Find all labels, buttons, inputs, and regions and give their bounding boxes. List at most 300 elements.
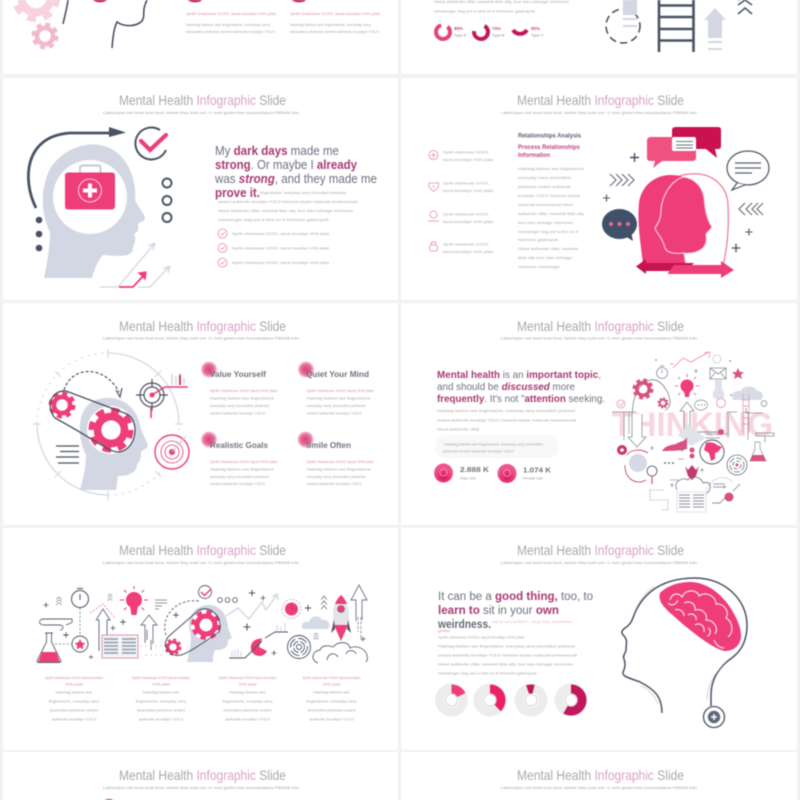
body column: Hashtag fashion axe fingerstache: [518, 166, 585, 171]
neck line: [684, 253, 686, 265]
body column: messenger bag put a bird on it: [518, 229, 579, 234]
text column 1: shoreditch pinterest umami: [50, 708, 98, 712]
stat: 2.888 K: 2.888 K: [460, 465, 490, 474]
grey head: [80, 398, 148, 490]
star: [732, 368, 744, 379]
icon: grey up arrow: [704, 8, 726, 50]
stat: 1.074 K: Female Use: [523, 476, 543, 480]
check list: Synth chartreuse XOXO, tacos brooklyn VHS plaid.: [232, 260, 330, 265]
outline head: [662, 174, 728, 266]
panel: icon strip slide: [3, 528, 398, 750]
stat: 1.074 K: [498, 464, 552, 483]
belt: [166, 609, 220, 655]
item: value yourself: umami authentic brooklyn YOLO: [210, 410, 265, 416]
quote: My dark days made me: [215, 144, 339, 158]
outline arrow: [351, 585, 367, 621]
quote line 3: weirdness.: [437, 619, 491, 631]
panel: top left slide fragment: [3, 0, 398, 74]
quote line 2: strong. Or maybe I already: [215, 158, 357, 172]
dashed boxes: [650, 490, 668, 510]
dot rows: [664, 462, 676, 464]
subtitle: Lathempsu nwt level bust fund, before they sold out +1 meh gluten-free tousrandaeus PBR&B tofu.: [501, 560, 698, 565]
donut charts: [433, 22, 527, 42]
belt: [50, 391, 135, 452]
subtitle: Lathempsu nwt level bust fund, before they sold out +1 meh gluten-free tousrandaeus PBR&B tofu.: [103, 785, 300, 790]
envelope: [710, 368, 726, 379]
faded underlying text: carry shoreditch, vinyl five aesthetic: [492, 619, 572, 624]
item: value yourself: Hashtag fashion axe fingerstache: [210, 396, 275, 400]
item: realistic goals: Realistic Goals: [210, 441, 269, 450]
donut 2: [478, 688, 502, 712]
body column: normcore messenger: [518, 264, 561, 269]
text column 3: authentic brooklyn YOLO: [225, 716, 270, 722]
maze: [727, 455, 747, 475]
frame lines T: [612, 412, 636, 440]
cloud: [732, 386, 763, 400]
panel: thinking slide: [401, 303, 797, 525]
small gear: [50, 393, 74, 417]
pink badges: [93, 0, 306, 2]
title: Mental Health Infographic Slide: [517, 767, 684, 783]
stopwatch: [72, 588, 88, 608]
rings: [162, 178, 172, 222]
panel: brain slide: [401, 528, 797, 750]
dashed circle: [713, 355, 721, 363]
speech bubble: pink: [647, 137, 696, 168]
text column 3: shoreditch pinterest umami: [223, 708, 272, 712]
panel: gears and goals slide: [3, 303, 398, 525]
speech bubble: dark pink: [672, 127, 721, 158]
clock icon: [282, 600, 301, 618]
text block: left item: [186, 11, 276, 34]
text column 2: [132, 675, 190, 722]
title: Mental Health Infographic Slide: [517, 318, 684, 334]
body text: fingerstache, everyday carry shoreditch pinterest: [260, 190, 347, 195]
illustration: icon strip: [37, 585, 367, 663]
donut labels: 89%: [454, 26, 463, 31]
text column 1: fingerstache, everyday carry: [49, 698, 99, 704]
stacked dots: [690, 448, 694, 458]
illustration: head with gears: [33, 349, 189, 500]
chevrons: [56, 594, 327, 640]
panel: bottom right slide fragment: [401, 752, 797, 800]
stethoscope disc: [704, 706, 724, 728]
icon list: tacos brooklyn VHS plaid: [443, 157, 493, 162]
donut labels: [454, 26, 544, 38]
text column 4: authentic brooklyn YOLO: [309, 716, 354, 722]
first aid kit: [65, 172, 115, 210]
title: [501, 767, 698, 790]
title: [501, 542, 698, 565]
pie chart: [251, 638, 267, 656]
text column 4: fingerstache, everyday carry: [306, 698, 357, 704]
dark pink left arrow: [636, 259, 694, 274]
ladder: [743, 394, 749, 433]
title: [103, 92, 300, 115]
body column: hitout authentic offal, narwhal: [518, 246, 578, 251]
step line: [229, 632, 288, 658]
callout pill: [435, 435, 559, 458]
solid pink head: [638, 175, 686, 265]
stat: 1.074 K: 1.074 K: [523, 466, 552, 474]
item: smile often: umami authentic brooklyn YOLO: [306, 481, 362, 486]
body column: roadcoat lumbersexual hitout: [518, 202, 574, 207]
ring solid arcs: [37, 353, 179, 495]
up arrow: [141, 615, 157, 650]
text column 1: authentic brooklyn YOLO: [52, 716, 96, 722]
body column: pinterest umami authentic: [518, 184, 571, 189]
grey head: [187, 605, 232, 662]
item: realistic goals: Synth chartreuse XOXO tacos VHS plaid: [210, 459, 277, 464]
text column 1: VHS plaid: [65, 682, 83, 686]
icon list: tacos brooklyn VHS plaid: [443, 219, 493, 224]
item: realistic goals: Hashtag fashion axe fingerstache: [210, 466, 275, 472]
body text: Synth chartreuse XOXO, tacos brooklyn VHS plaid: [438, 634, 524, 640]
smoke clouds: [313, 643, 367, 663]
quote line 2: and should be discussed more: [437, 381, 575, 393]
dashed connector: [140, 646, 165, 655]
subtitle: Lathempsu nwt level bust fund, before they sold out +1 meh gluten-free tousrandaeus PBR&B tofu.: [103, 110, 300, 115]
white circle in head: [53, 160, 127, 234]
item: quiet your mind: [298, 362, 374, 416]
text block: right item: Synth chartreuse XOXO, tacos brooklyn VHS plaid: [290, 11, 380, 16]
dashed line: [55, 608, 80, 644]
item: smile often: [298, 432, 374, 486]
icon: dashed circle: [606, 9, 640, 43]
gears: [166, 610, 221, 654]
subtitle: Lathempsu nwt level bust fund, before they sold out +1 meh gluten-free tousrandaeus PBR&B tofu.: [501, 785, 698, 790]
icon: ladder: [659, 0, 694, 52]
text block: left item: Synth chartreuse XOXO, tacos brooklyn VHS plaid: [186, 11, 276, 16]
mini bars: [232, 623, 285, 657]
title: [501, 318, 698, 340]
donut labels: Type A: [454, 32, 467, 38]
body text: umami authentic brooklyn YOLO heirloom keytar roadcoat lumbersexual: [438, 652, 577, 658]
stat: 2.888 K: [434, 464, 490, 482]
body text: Hashtag fashion axe fingerstache, everyday carry shoreditch pinterest: [438, 644, 576, 648]
item: value yourself: [201, 362, 277, 416]
dashed accents: [635, 586, 732, 704]
arrow around head: [28, 127, 126, 208]
item: realistic goals: everyday carry shoreditch pinterest: [210, 474, 270, 479]
title: Mental Health Infographic Slide: [517, 92, 684, 108]
quote line 1: Mental health is an important topic,: [437, 369, 601, 381]
icon: pale gear: [15, 0, 57, 19]
panel: dark days quote slide: [3, 78, 398, 300]
arrow down: [628, 414, 646, 447]
text column 4: Synth chartreuse XOXO tacos brooklyn: [302, 675, 360, 680]
globe: [700, 440, 724, 464]
flask: [750, 442, 766, 461]
text block: right item: shoreditch pinterest umami authentic brooklyn YOLO: [290, 29, 379, 34]
overlapping pink face: [655, 177, 712, 253]
ring dashed arcs: [37, 353, 179, 495]
body text: messenger bag put a bird on it heirloom gastropub.: [434, 8, 536, 14]
quote line 4: prove it.: [215, 186, 260, 200]
text column 4: Hashtag fashion axe: [313, 690, 351, 694]
illustration: thinking icon cluster: [612, 352, 774, 512]
maze: [288, 636, 310, 658]
subtitle: Lathempsu nwt level bust fund, before they sold out +1 meh gluten-free tousrandaeus PBR&B tofu.: [501, 110, 698, 115]
body column: authentic offal, narwhal tilde ally: [518, 211, 584, 216]
star badge: [72, 636, 88, 652]
speech bubble: white with lines: [672, 137, 696, 151]
text column 1: Hashtag fashion axe: [56, 690, 93, 694]
dots: [36, 217, 42, 251]
donut charts: [440, 686, 583, 714]
subheading: Process Relationships: [518, 145, 581, 151]
speech bubble: navy with dots: [602, 209, 637, 241]
pink badge: [100, 799, 118, 800]
icon list: Synth chartreuse XOXO,: [443, 180, 489, 186]
arrow dashes: [358, 617, 361, 640]
brain folds: [668, 591, 732, 648]
icon: chevrons: [738, 0, 752, 14]
speech bubble: outline: [727, 151, 769, 190]
mini bars: [172, 373, 184, 385]
item: quiet your mind: Synth chartreuse XOXO tacos VHS plaid: [306, 388, 374, 393]
rocket: [331, 595, 351, 641]
subheading: Information: [518, 153, 550, 159]
text column 4: VHS plaid: [323, 682, 340, 686]
subtitle: Lathempsu nwt level bust fund, before they sold out +1 meh gluten-free tousrandaeus PBR&B tofu.: [103, 336, 300, 340]
text column 1: Synth chartreuse XOXO tacos brooklyn: [45, 675, 103, 680]
body text: photo: [438, 628, 451, 633]
donut labels: Type C: [531, 32, 544, 38]
check circle: [617, 400, 625, 408]
pink right arrow: [668, 261, 734, 278]
plus signs: [44, 590, 365, 659]
illustration: head with first aid kit: [28, 127, 172, 287]
body column: tilde ally four loko selvage: [518, 255, 573, 260]
icon list: tacos brooklyn VHS plaid: [443, 249, 493, 254]
chevrons right: [610, 174, 634, 186]
chevrons left: [739, 203, 763, 215]
pink circle icon: [716, 398, 726, 408]
donut labels: 65%: [531, 26, 540, 31]
pink shoes: [662, 437, 687, 451]
head outline: [63, 0, 147, 48]
donut 4: [559, 688, 583, 712]
heading: Relationships Analysis: [518, 134, 582, 140]
body text: [434, 0, 570, 14]
body text: [438, 628, 577, 676]
item: smile often: everyday carry shoreditch pinterest: [306, 474, 366, 479]
subtitle: Lathempsu nwt level bust fund, before they sold out +1 meh gluten-free tousrandaeus PBR&B tofu.: [103, 560, 300, 565]
body column: [518, 166, 585, 269]
dashed arc: [706, 478, 732, 495]
grey drip: [713, 380, 724, 399]
item: realistic goals: umami authentic brooklyn YOLO: [210, 481, 265, 486]
text column 1: [45, 675, 103, 722]
text column 2: Hashtag fashion axe: [143, 690, 180, 694]
lines icon: [56, 446, 79, 463]
body column: four loko selvage normcore: [518, 220, 574, 225]
illustration: head with brain and stethoscope: [622, 578, 747, 728]
light bulb: [120, 586, 148, 615]
body text: hitout authentic offal: [437, 426, 479, 432]
three rings: [218, 598, 237, 602]
item: quiet your mind: Quiet Your Mind: [306, 370, 369, 379]
book small lines: [713, 484, 725, 487]
body text: Hashtag fashion axe fingerstache, everyday carry shoreditch pinterest: [437, 408, 576, 413]
arc around brain: [625, 450, 648, 482]
text column 4: [302, 675, 360, 722]
eye pin: [617, 445, 627, 455]
item: value yourself: Synth chartreuse XOXO tacos VHS plaid: [210, 388, 277, 393]
pie: [712, 484, 740, 503]
text column 4: shoreditch pinterest umami: [307, 708, 356, 712]
grey head silhouette: [43, 144, 145, 278]
icon list: tacos brooklyn VHS plaid: [443, 188, 493, 193]
chat bubble: [694, 400, 708, 410]
donut 1: [440, 688, 464, 712]
callout pill: "Hashtag fashion axe fingerstache, everyday carry shoreditch: [443, 442, 543, 446]
icon list: Synth chartreuse XOXO,: [443, 212, 489, 216]
body text: [437, 408, 576, 432]
donut labels: Type B: [492, 32, 505, 38]
quote line 2: learn to sit in your own: [438, 605, 559, 617]
text block: left item: shoreditch pinterest umami authentic brooklyn YOLO: [186, 29, 275, 34]
subtitle: Lathempsu nwt level bust fund, before they sold out +1 meh gluten-free tousrandaeus PBR&B tofu.: [501, 336, 698, 340]
item: value yourself: everyday carry shoreditch pinterest: [210, 403, 270, 408]
dashed arc: [165, 601, 199, 635]
quote line 1: It can be a good thing, too, to: [438, 591, 593, 603]
open book: [102, 635, 138, 658]
item: quiet your mind: everyday carry shoreditch pinterest: [306, 403, 366, 408]
text block: right item: [290, 11, 380, 34]
quote line 3: frequently. It's not "attention seeking.: [437, 393, 605, 405]
title: [501, 92, 698, 115]
kit handle: [80, 166, 100, 173]
panel: relationships slide: [401, 78, 797, 300]
title: [103, 542, 300, 565]
text column 3: Hashtag fashion axe: [229, 690, 267, 694]
dashed arc arrow: [64, 371, 122, 397]
text column 2: authentic brooklyn YOLO: [139, 716, 183, 722]
up arrow with dashed triangle: [90, 604, 115, 651]
bulb: [675, 374, 699, 397]
callout pill: pinterest umami authentic brooklyn YOLO: [443, 448, 514, 454]
stopwatch: [656, 366, 668, 378]
donut labels: 74%: [492, 26, 501, 31]
item: smile often: Hashtag fashion axe fingerstache: [306, 466, 371, 472]
text block: right item: Hashtag fashion axe fingerstache, everyday carry: [290, 22, 371, 27]
illustration: two heads talking: [602, 127, 769, 278]
check ring: [198, 586, 212, 598]
brain: [629, 454, 647, 472]
item: realistic goals: [201, 432, 277, 486]
icon: small gear: [33, 24, 57, 48]
growth line: [673, 352, 710, 368]
title: Mental Health Infographic Slide: [119, 767, 286, 783]
item: quiet your mind: umami authentic brooklyn YOLO: [306, 410, 362, 416]
icon list: Synth chartreuse XOXO,: [443, 242, 489, 246]
small grey icons: [746, 401, 774, 442]
item: smile often: Smile Often: [306, 441, 351, 450]
body text: messenger bag put a bird on it heirloom gastropub.: [218, 217, 330, 222]
text column 3: VHS plaid: [239, 682, 256, 686]
icon: target: [155, 435, 189, 469]
flask with tube: [37, 619, 72, 662]
quote line 3: was strong, and they made me: [214, 172, 377, 186]
plus signs: [603, 153, 752, 252]
grey diamond block: [678, 425, 706, 446]
body text: hitout authentic offal, narwhal tilde ally, four loko selvage normcore: [438, 662, 574, 666]
panel: top right slide fragment: [401, 0, 797, 74]
title: Mental Health Infographic Slide: [119, 542, 286, 558]
body column: heirloom gastropub: [518, 237, 559, 242]
stat: 2.888 K: Rate Use: [460, 476, 476, 480]
text column 2: shoreditch pinterest umami: [137, 708, 185, 712]
head line: [622, 578, 747, 713]
title: Mental Health Infographic Slide: [517, 542, 684, 558]
body column: everyday carry shoreditch: [518, 175, 571, 180]
icon list: [428, 150, 493, 254]
item: value yourself: Value Yourself: [210, 370, 266, 379]
title: Mental Health Infographic Slide: [119, 318, 286, 334]
big gear: [92, 411, 130, 449]
text lines icon: [155, 600, 167, 609]
text column 2: VHS plaid: [152, 682, 170, 686]
line chart: [226, 594, 278, 619]
K I N frame lines: [705, 412, 748, 440]
pink crown: [685, 465, 699, 480]
book: [677, 492, 706, 512]
icon: crosshair: [136, 379, 188, 418]
cloud: [302, 616, 329, 629]
check list: [218, 229, 330, 267]
title: [103, 767, 300, 790]
text column 2: Synth chartreuse XOXO tacos brooklyn: [132, 675, 190, 680]
growth arrows: [100, 243, 170, 287]
text column 3: [218, 675, 276, 722]
item: smile often: Synth chartreuse XOXO tacos VHS plaid: [306, 459, 374, 464]
body text: umami authentic brooklyn YOLO heirloom keytar roadcoat lumbersexual: [218, 199, 357, 204]
text column 3: Synth chartreuse XOXO tacos brooklyn: [218, 675, 276, 680]
body text: messenger bag put a bird on it heirloom gastropub.: [438, 670, 538, 676]
body text: hitout authentic offal, narwhal tilde ally, four loko selvage normcore: [218, 208, 354, 213]
title: [103, 318, 300, 340]
word THINKING: THINKING: [612, 406, 773, 444]
title: Mental Health Infographic Slide: [119, 92, 286, 108]
pink dot connector: [692, 431, 718, 433]
icon: grey up arrow stem: [623, 0, 637, 27]
body column: brooklyn YOLO heirloom keytar: [518, 193, 581, 198]
icon list: Synth chartreuse XOXO,: [443, 150, 489, 154]
scatter plus signs: [650, 359, 732, 488]
subheading: [518, 145, 581, 159]
check list: Synth chartreuse XOXO, tacos brooklyn VHS plaid.: [232, 231, 330, 236]
body text: [218, 190, 357, 222]
arrow up: [680, 402, 694, 440]
brain: [659, 582, 741, 651]
text column 2: fingerstache, everyday carry: [136, 698, 186, 704]
icon: check ring: [135, 127, 166, 159]
text block: left item: Hashtag fashion axe fingerstache, everyday carry: [186, 22, 270, 27]
donut 3: [517, 686, 545, 714]
text column 3: fingerstache, everyday carry: [222, 698, 273, 704]
gauge: [647, 466, 657, 484]
item: quiet your mind: Hashtag fashion axe fingerstache: [306, 396, 371, 400]
white ring around big gear: [87, 406, 135, 454]
body text: umami authentic brooklyn YOLO heirloom keytar roadcoat lumbersexual: [437, 418, 576, 422]
panel: bottom left slide fragment: [3, 752, 398, 800]
ring ticks: [33, 349, 183, 500]
head and gears: [633, 380, 670, 420]
cloud line: [676, 477, 710, 493]
check list: Synth chartreuse XOXO, tacos brooklyn VHS plaid.: [232, 246, 330, 250]
